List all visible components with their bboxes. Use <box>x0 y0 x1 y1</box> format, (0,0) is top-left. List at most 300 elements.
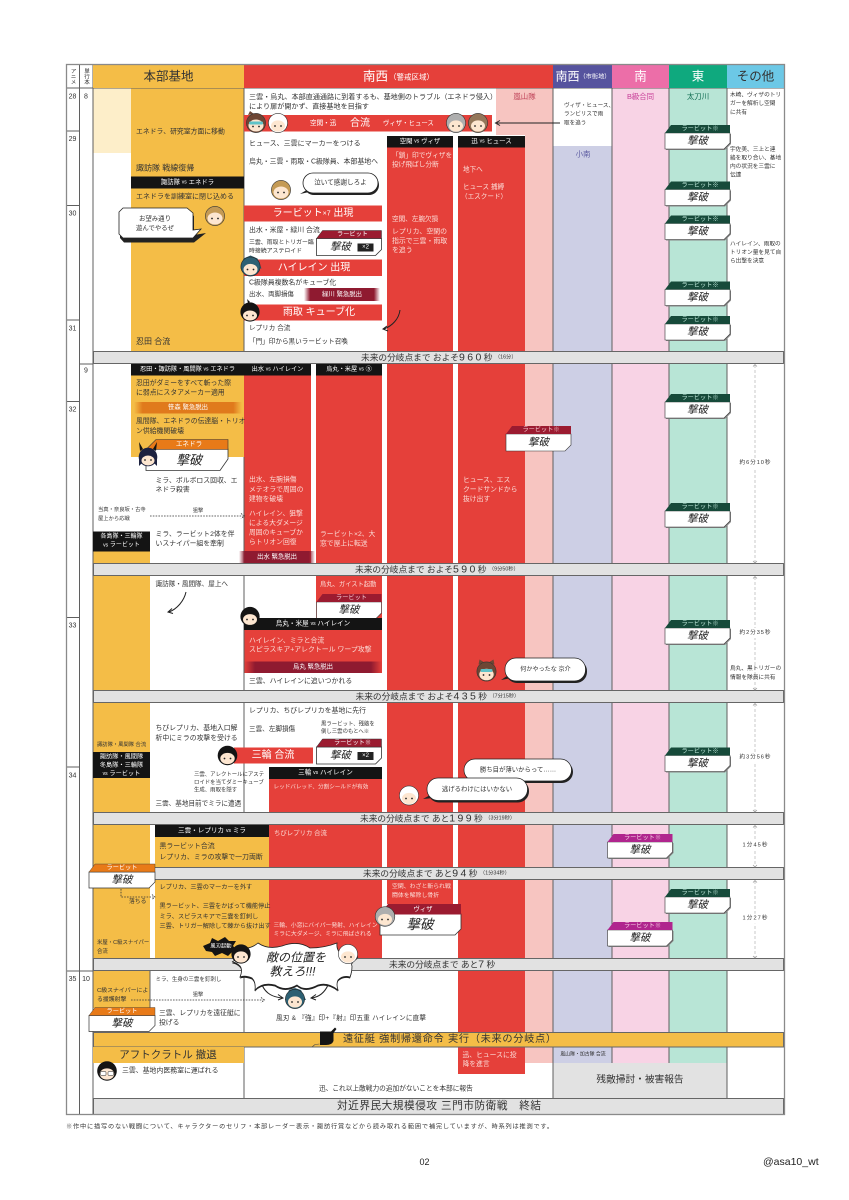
text: final report: 迅、ヒュースに投 <box>462 1050 517 1059</box>
panel: withdrawal: アフトクラトル 撤退 <box>119 1049 217 1061</box>
arrow: pursuit <box>496 120 560 126</box>
callout: omoi doori <box>119 208 206 242</box>
text: mira collects: ミラ、ボルボロス回収、エ <box>156 476 238 484</box>
table header: アニメ <box>70 68 76 85</box>
duration markers: 約3分56秒 <box>740 752 771 760</box>
text: other column: に共有 <box>730 108 747 116</box>
table header: 南 <box>634 68 647 84</box>
panel: base headquarters, first period: エネドラ、研究室方面に移動 <box>136 126 225 136</box>
callout: burst shout: 敵の位置を <box>266 950 326 964</box>
panel: period six left: レプリカ、三雲のマーカーを外す <box>160 883 252 891</box>
time remaining bars: 未来の分岐点まで およそ590秒 （9分50秒） <box>355 564 519 576</box>
text: black trigger share: 情報を隊員に共有 <box>730 673 776 681</box>
panel: period four left: 冬島隊・三輪隊 <box>100 761 143 769</box>
volume and episode numbers: 32 <box>69 406 76 414</box>
text: other column <box>730 90 781 264</box>
panel: period four left: 諏訪隊・風間隊 <box>100 752 143 760</box>
text: replica: レプリカ 合流 <box>249 323 291 332</box>
column backgrounds <box>66 64 784 1114</box>
table header: 南西（警戒区域） <box>363 68 434 84</box>
text: joining: 時接続アステロイド <box>249 246 302 254</box>
badge: east rabbit 2: 撃破 <box>687 192 709 204</box>
panel: red column one: レプリカ、空閑の <box>392 228 447 236</box>
arrow: curved to replica <box>383 310 400 331</box>
callout: omoi doori: 遊んでやるぜ <box>136 223 175 232</box>
panel: mikumo vs mira: レプリカ、ミラの攻撃で一刀両断 <box>160 852 263 861</box>
banner: miwa joins: 三輪 合流 <box>252 748 294 761</box>
panel: period four left: 三雲、アレクトールにアステ <box>194 771 264 778</box>
volume and episode numbers: 31 <box>69 326 76 332</box>
badge: east rabbit 5 <box>665 316 731 341</box>
icon: kazakiri burst: 風刃起動 <box>210 942 232 950</box>
badge: east rabbit 2: ラービット※ <box>681 181 719 189</box>
panel: karasuma vs hairein: スピラスキア+アレクトール ワープ攻撃 <box>249 644 372 654</box>
panel: period two left: 風間隊、エネドラの伝達脳・トリオ <box>136 416 246 425</box>
panel: red column one: 投げ飛ばし分断 <box>392 160 439 168</box>
badge: viza defeated <box>380 904 461 958</box>
badge: rabbit defeated x2: 撃破 <box>330 241 352 253</box>
badge: east rabbit 7: ラービット※ <box>681 503 719 511</box>
panel: period six left: 落ちる <box>129 897 146 905</box>
panel: red column two: 迅 vs ヒュース <box>471 136 512 145</box>
panel: period two left: に弱点にスタアメーカー適用 <box>136 388 225 396</box>
text: miwa viper: 闘体を解除し骨折 <box>392 891 439 899</box>
duration markers <box>737 364 773 958</box>
text: other column: 宇佐美、三上と連 <box>730 145 776 153</box>
text: hyuse escapes <box>463 476 517 503</box>
table header: その他 <box>737 70 775 84</box>
text: final report: 迅、これ以上敵戦力の追加がないことを本部に報告 <box>319 1084 473 1092</box>
text: joining <box>249 225 320 254</box>
panel: period seven left: 投げる <box>159 1018 179 1026</box>
label: snipers vs rabbit: vs ラービット <box>103 540 140 548</box>
panel: izumi vs hairein: 出水 緊急脱出 <box>257 552 297 560</box>
badge: east rabbit 4: 撃破 <box>687 292 709 304</box>
badge: east rabbit 3: ラービット※ <box>681 215 719 223</box>
text: hyuse escapes: ヒュース、エス <box>463 476 510 484</box>
panel: karasuma yoneya vs <box>316 364 382 548</box>
panel: period four left: 三雲、基地目前でミラに遭遇 <box>156 798 242 808</box>
table header: 南西（市街地） <box>556 68 610 84</box>
panel: red column two: （エスクード） <box>461 192 507 200</box>
text: joining: 出水・米屋・緑川 合流 <box>249 225 320 234</box>
text: mira collects: 狙撃 <box>193 506 203 514</box>
badge: east rabbit 1: ラービット※ <box>681 125 719 133</box>
panel: izumi vs hairein <box>239 364 315 563</box>
callout: nanika yatta: 何かやったな 京介 <box>520 665 571 673</box>
banner: amatori cube <box>244 304 382 320</box>
panel: red column one <box>387 136 453 254</box>
panel: miwa vs hairein: レッドバレッド、分割シールドが有効 <box>274 782 369 790</box>
text: cube casualties: C級隊員複数名がキューブ化 <box>249 278 336 286</box>
badge: south rabbit 2 <box>608 922 674 947</box>
panel: withdrawal <box>93 1047 244 1074</box>
text: miwa viper: 三輪、小窓にバイパー発射、ハイレイン・ <box>274 921 383 929</box>
badge: east rabbit 6 <box>665 394 731 419</box>
panel: izumi vs hairein: メテオラで周囲の <box>249 486 304 494</box>
text: miwa viper <box>274 882 451 938</box>
panel: red column two: ヒュース 捕縛 <box>463 182 504 191</box>
badge: orange rabbit 2: ラービット <box>107 1007 137 1015</box>
volume and episode numbers: 29 <box>69 136 76 143</box>
text: cube casualties: 緑川 緊急脱出 <box>322 289 362 298</box>
badge: east rabbit 7 <box>665 503 731 528</box>
duration markers: 1分27秒 <box>742 914 768 922</box>
icon: blond ally <box>271 180 291 200</box>
text: city pursuit: ヴィザ・ヒュース、 <box>564 101 614 109</box>
text: final report <box>319 1050 684 1092</box>
icon: viza second <box>375 907 395 926</box>
text: hyuse escapes: 抜け出す <box>463 494 490 503</box>
panel: izumi vs hairein: による大ダメージ <box>249 518 303 527</box>
badge: east rabbit 10: ラービット※ <box>681 889 719 897</box>
panel: period four left: 諏訪隊・風間隊 合流 <box>97 740 147 748</box>
badge: rabbit x2 second: ラービット※ <box>334 739 371 747</box>
badge: east rabbit 1 <box>665 125 731 150</box>
panel: period six left: ミラ、スピラスキアで三雲を釘刺し <box>160 912 258 920</box>
time remaining bars: 未来の分岐点まで あと199秒 （3分19秒） <box>360 812 515 824</box>
panel: period four left: 生成、雨取を隠す <box>194 786 237 794</box>
badge: orange rabbit 1 <box>89 864 155 888</box>
badge: viza defeated: ヴィザ <box>413 904 433 913</box>
badge: east rabbit 4: ラービット※ <box>681 281 719 289</box>
callout: omoi doori: お望み通り <box>139 214 171 222</box>
badge: east rabbit 7: 撃破 <box>687 513 709 525</box>
table header: 単行本 <box>83 67 90 86</box>
text: mira collects: ネドラ殺害 <box>156 484 190 494</box>
text: other column: 内の状況を三雲に <box>730 162 776 170</box>
icon: blond character <box>205 206 225 226</box>
badge: orange rabbit 2: 撃破 <box>112 1018 134 1030</box>
time remaining bars: 遠征艇 強制帰還命令 実行（未来の分岐点） <box>343 1032 556 1045</box>
icon: kuga second <box>399 786 419 805</box>
badge: red rabbit <box>506 426 571 451</box>
column labels <box>513 92 709 158</box>
panel: mikumo vs mira: 三雲・レプリカ vs ミラ <box>178 826 246 834</box>
badge: south rabbit 1 <box>608 834 674 859</box>
text: mira collects: ミラ、ラービット2体を伴 <box>156 529 235 538</box>
panel: period seven left <box>97 975 426 1026</box>
badge: east rabbit 9: 撃破 <box>687 758 709 770</box>
panel: izumi vs hairein: ハイレイン、狙撃 <box>249 508 303 518</box>
panel: period four left: 析中にミラの攻撃を受ける <box>156 733 238 742</box>
panel: period four left: ロイドを当てダミーキューブ <box>194 778 264 786</box>
volume and episode numbers: 28 <box>69 94 76 100</box>
badge: east rabbit 5: 撃破 <box>687 326 709 338</box>
banner: hairein appears: ハイレイン 出現 <box>278 262 350 274</box>
panel: period seven left: 狙撃 <box>193 990 203 998</box>
banner: rabbit appears <box>244 206 382 222</box>
panel: period two left: 忍田がダミーをすべて斬った際 <box>136 378 231 387</box>
text: other column: 絡を取り合い、基地 <box>730 154 781 162</box>
badge: orange rabbit 1: 撃破 <box>112 874 134 886</box>
duration markers: 1分45秒 <box>742 840 768 848</box>
panel: karasuma vs hairein <box>244 618 382 685</box>
text: final report: 嵐山隊・加古隊 合流 <box>560 1050 606 1058</box>
badge: rabbit defeated x2: ×2 <box>362 244 370 250</box>
table header: 本部基地 <box>143 70 194 84</box>
text: joining: 三雲、雨取とトリガー臨 <box>249 238 314 246</box>
banner: hairein appears <box>244 260 382 276</box>
arrow: sniper shot two <box>131 998 264 1002</box>
badge: east rabbit 8: 撃破 <box>687 630 709 642</box>
text: other column: ら出撃を決意 <box>730 256 764 264</box>
banner: miwa joins <box>234 748 313 764</box>
panel: karasuma yoneya vs: 烏丸・米屋 vs ⑤ <box>326 365 372 373</box>
text: other column: ハイレイン、雨取の <box>730 240 781 248</box>
badge: east rabbit 4 <box>665 281 731 306</box>
text: cube casualties <box>249 278 380 301</box>
panel: period four left: vs ラービット <box>103 769 140 777</box>
icon: kuga <box>268 113 288 133</box>
text: replica: 「門」印から黒いラービット召喚 <box>249 336 348 346</box>
text: city pursuit: ランビリスで雨 <box>564 110 604 118</box>
icon: karasuma <box>240 607 260 626</box>
duration markers: 約2分35秒 <box>740 628 771 636</box>
text: city pursuit <box>564 101 614 126</box>
text: mira collects: 当真・奈良坂・古寺 <box>98 505 146 513</box>
duration markers: 約6分10秒 <box>740 458 771 466</box>
column labels: 嵐山隊 <box>513 92 536 101</box>
panel: period six left: 合流 <box>97 947 108 955</box>
panel: base headquarters, first period <box>131 126 244 346</box>
callout: nigeru: 逃げるわけにはいかない <box>442 784 512 793</box>
banner: merge: ヴィザ・ヒュース <box>383 118 434 127</box>
panel: withdrawal: 三雲、基地内医務室に運ばれる <box>122 1066 218 1074</box>
text: other column: トリオン量を見て自 <box>730 248 781 256</box>
panel: period six left: 三雲、トリガー解除して棘から抜け出す <box>160 922 271 930</box>
volume and episode numbers <box>69 94 90 983</box>
text: replica <box>249 323 348 346</box>
banner: merge: 合流 <box>350 116 370 129</box>
panel: period three left <box>156 579 376 614</box>
column rules <box>66 64 784 1114</box>
banner: amatori cube: 雨取 キューブ化 <box>283 305 355 318</box>
panel: period four left <box>93 706 375 808</box>
badge: viza defeated: 撃破 <box>406 917 436 932</box>
panel: period seven left: 風刃 & 『強』印+『射』印五重 ハイレインに直撃 <box>276 1013 426 1022</box>
panel: period seven left: 三雲、レプリカを遠征艇に <box>159 1008 241 1017</box>
icon: hairein <box>240 256 262 276</box>
icon: kazakiri burst <box>203 937 238 956</box>
icon: jin <box>246 111 266 133</box>
panel: miwa vs hairein <box>269 767 382 790</box>
text: miwa viper: ミラに大ダメージ、ミラに飛ばされる <box>274 930 372 938</box>
panel: karasuma vs hairein: ハイレイン、ミラと合流 <box>249 636 324 644</box>
badge: east rabbit 8: ラービット※ <box>681 620 719 628</box>
volume and episode numbers: 33 <box>69 622 76 630</box>
badge: orange rabbit 2 <box>89 1007 155 1032</box>
panel: mikumo vs mira <box>155 825 328 861</box>
author handle: @asa10_wt <box>763 1156 819 1168</box>
volume and episode numbers: 34 <box>69 772 76 780</box>
badge: rabbit x2 second <box>316 739 382 764</box>
panel: red column one: 空閑、左腕欠損 <box>392 214 439 223</box>
panel: izumi vs hairein: 建物を破壊 <box>249 494 283 503</box>
column labels: B級合同 <box>627 92 654 101</box>
panel: period three left: 烏丸、ガイスト起動 <box>320 579 376 588</box>
panel: period three left: 諏訪隊・風間隊、屋上へ <box>156 579 228 588</box>
panel: base headquarters, first period: 忍田 合流 <box>136 336 170 346</box>
text: hyuse escapes: クードサンドから <box>463 486 517 494</box>
panel: mikumo vs mira: ちびレプリカ 合流 <box>274 828 328 837</box>
panel: red column two: 地下へ <box>463 164 483 174</box>
panel: izumi vs hairein: 出水 vs ハイレイン <box>252 365 303 373</box>
badge: rabbit x2 second: ×2 <box>362 753 370 759</box>
panel: izumi vs hairein: 出水、左腕損傷 <box>249 474 297 484</box>
panel: red column one: 空閑 vs ヴィザ <box>400 136 441 145</box>
panel: period two left: ン供給機関破壊 <box>136 426 184 435</box>
badge: red rabbit behind band: 撃破 <box>338 604 361 616</box>
badge: red rabbit: ラービット※ <box>522 426 560 434</box>
panel: base headquarters, first period: 諏訪隊 vs エネドラ <box>161 177 214 186</box>
icon: viza <box>446 113 466 133</box>
panel: minami west first period intro: ヒュース、三雲にマーカーをつける <box>249 140 361 148</box>
time remaining bars: 未来の分岐点まで あと94秒 （1分34秒） <box>363 868 510 880</box>
volume and episode numbers: 35 <box>69 976 76 983</box>
callout: kachime <box>464 759 573 783</box>
page number: 02 <box>419 1157 430 1167</box>
badge: east rabbit 2 <box>665 181 731 206</box>
label: snipers vs rabbit <box>93 532 150 552</box>
arrow: falls <box>121 889 155 900</box>
icon: amatori <box>240 299 260 322</box>
badge: east rabbit 10: 撃破 <box>687 899 709 911</box>
badge: orange rabbit 1: ラービット <box>107 864 137 872</box>
time remaining bars: 未来の分岐点まで およそ435秒 （7分15秒） <box>356 690 519 702</box>
time remaining bars: 対近界民大規模侵攻 三門市防衛戦 終結 <box>337 1099 541 1112</box>
icon: jin second <box>477 660 496 681</box>
panel: base headquarters, first period: 諏訪隊 戦線復帰 <box>136 162 194 172</box>
badge: rabbit defeated x2: ラービット <box>337 230 368 238</box>
badge: east rabbit 3: 撃破 <box>687 226 709 238</box>
volume and episode numbers: 8 <box>84 94 88 100</box>
text: other column: ガーを解析し空閑 <box>730 99 776 107</box>
panel: period seven left: C級スナイパーによ <box>97 986 148 994</box>
panel: karasuma yoneya vs: 窓で屋上に転送 <box>320 538 368 548</box>
time remaining bars <box>94 352 784 1114</box>
volume and episode numbers: 9 <box>84 368 88 374</box>
text: mira collects: 屋上から応戦 <box>98 514 130 522</box>
badge: enedora defeated <box>146 440 228 470</box>
icon: enedora <box>139 442 157 466</box>
arrows: to hairein <box>262 985 328 1000</box>
callout: burst shout <box>232 943 358 992</box>
panel: period six left: 黒ラービット、三雲をかばって機能停止 <box>160 902 270 910</box>
icon: kuga third <box>338 944 358 964</box>
icon: miwa <box>218 746 237 765</box>
badge: east rabbit 8 <box>665 620 731 645</box>
callout: kachime: 勝ち目が薄いからって…… <box>480 764 556 774</box>
banner: merge: 空閑・迅 <box>310 118 337 127</box>
panel: red column one: 指示で三雲・雨取 <box>392 236 447 245</box>
callout: nigeru <box>423 778 529 802</box>
badge: red rabbit behind band <box>316 594 382 619</box>
panel: base headquarters, first period: エネドラを訓練室に閉じ込める <box>136 192 234 200</box>
badge: red rabbit behind band: ラービット <box>336 594 367 602</box>
banner: rabbit appears: ラービット×7 出現 <box>273 207 353 219</box>
label: snipers vs rabbit: 各島隊・三輪隊 <box>100 532 143 540</box>
panel: period two left <box>131 364 246 435</box>
panel: mikumo vs mira: 黒ラービット合流 <box>160 841 215 850</box>
badge: east rabbit 1: 撃破 <box>687 135 709 147</box>
badge: east rabbit 9: ラービット※ <box>681 747 719 755</box>
badge: east rabbit 10 <box>665 889 731 914</box>
badge: enedora defeated: 撃破 <box>176 452 204 468</box>
badge: south rabbit 1: ラービット※ <box>624 834 661 842</box>
panel: period four left: 黒ラービット、残骸を <box>321 720 375 728</box>
volume and episode numbers: 10 <box>82 976 90 983</box>
panel: period two left: 笹森 緊急脱出 <box>168 402 208 411</box>
panel: red column two <box>458 136 525 200</box>
panel: period seven left: ミラ、生身の三雲を釘刺し <box>156 975 221 983</box>
panel: izumi vs hairein: 周囲のキューブか <box>249 528 303 536</box>
callout: burst shout: 教えろ!!! <box>269 964 316 978</box>
panel: karasuma vs hairein: 烏丸 緊急脱出 <box>293 662 333 670</box>
badge: rabbit defeated x2 <box>316 230 382 256</box>
badge: east rabbit 6: 撃破 <box>687 404 709 416</box>
panel: karasuma yoneya vs: ラービット×2、大 <box>320 529 376 538</box>
text: final report: 降を進言 <box>462 1059 490 1068</box>
table header: 東 <box>692 70 705 84</box>
panel: izumi vs hairein: らトリオン回復 <box>249 537 297 546</box>
text: city pursuit: 取を追う <box>564 118 586 126</box>
badge: east rabbit 6: ラービット※ <box>681 394 719 402</box>
panel: minami west first period intro <box>249 92 497 166</box>
text: cube casualties: 出水、両脚損傷 <box>249 289 294 298</box>
text: mira collects: いスナイパー組を牽制 <box>156 538 224 548</box>
badge: east rabbit 5: ラービット※ <box>681 316 719 324</box>
column labels: 小南 <box>576 150 590 158</box>
badge: south rabbit 2: ラービット※ <box>624 922 661 930</box>
icon: miwa second <box>231 944 251 964</box>
icon: expedition ship <box>312 1028 336 1047</box>
panel: karasuma vs hairein: 烏丸・米屋 vs ハイレイン <box>276 618 351 628</box>
column labels: 太刀川 <box>687 92 709 101</box>
panel: karasuma vs hairein: 三雲、ハイレインに追いつかれる <box>249 676 352 685</box>
outer frame <box>66 64 784 1114</box>
panel: red column one: 「鎖」印でヴィザを <box>392 150 452 160</box>
panel: period two left: 忍田・諏訪隊・風間隊 vs エネドラ <box>140 365 235 373</box>
badge: south rabbit 1: 撃破 <box>630 844 652 856</box>
icon: hairein second <box>285 988 306 1009</box>
panel: red column one: を追う <box>392 245 413 254</box>
text: other column: 木崎、ヴィザのトリ <box>730 90 781 98</box>
badge: red rabbit: 撃破 <box>528 436 550 448</box>
badge: enedora defeated: エネドラ <box>176 440 202 448</box>
text: black trigger share: 烏丸、黒トリガーの <box>730 664 781 672</box>
panel: period four left: 倒し三雲のもとへ※ <box>321 727 369 735</box>
arrow: sniper shot <box>150 514 244 518</box>
panel: period four left: 三雲、左脚損傷 <box>249 724 296 733</box>
time remaining bars: 未来の分岐点まで およそ960秒 （16分） <box>361 352 517 364</box>
badge: south rabbit 2: 撃破 <box>630 932 652 944</box>
panel: miwa vs hairein: 三輪 vs ハイレイン <box>298 768 353 776</box>
panel: period four left: ちびレプリカ、基地入口解 <box>156 723 238 732</box>
panel: period four left: レプリカ、ちびレプリカを基地に先行 <box>249 706 366 714</box>
panel: minami west first period intro: 烏丸・三雲・雨取・C級隊員、本部基地へ <box>249 156 378 166</box>
callout: nanika yatta <box>501 658 587 683</box>
panel: minami west first period intro: 三雲・烏丸、本部直通通路に到着するも、基地側のトラブル（エネドラ侵入） <box>249 92 497 101</box>
callout: naite <box>300 173 379 195</box>
icon: mikumo <box>97 1061 117 1081</box>
table header <box>70 64 784 88</box>
time remaining bars: 未来の分岐点まで あと7秒 <box>389 958 496 970</box>
badge: rabbit x2 second: 撃破 <box>330 750 352 762</box>
panel: period six left <box>97 883 271 955</box>
panel: period seven left: る援護射撃 <box>97 995 127 1003</box>
panel: period six left: 米屋・C級スナイパー <box>97 938 149 946</box>
